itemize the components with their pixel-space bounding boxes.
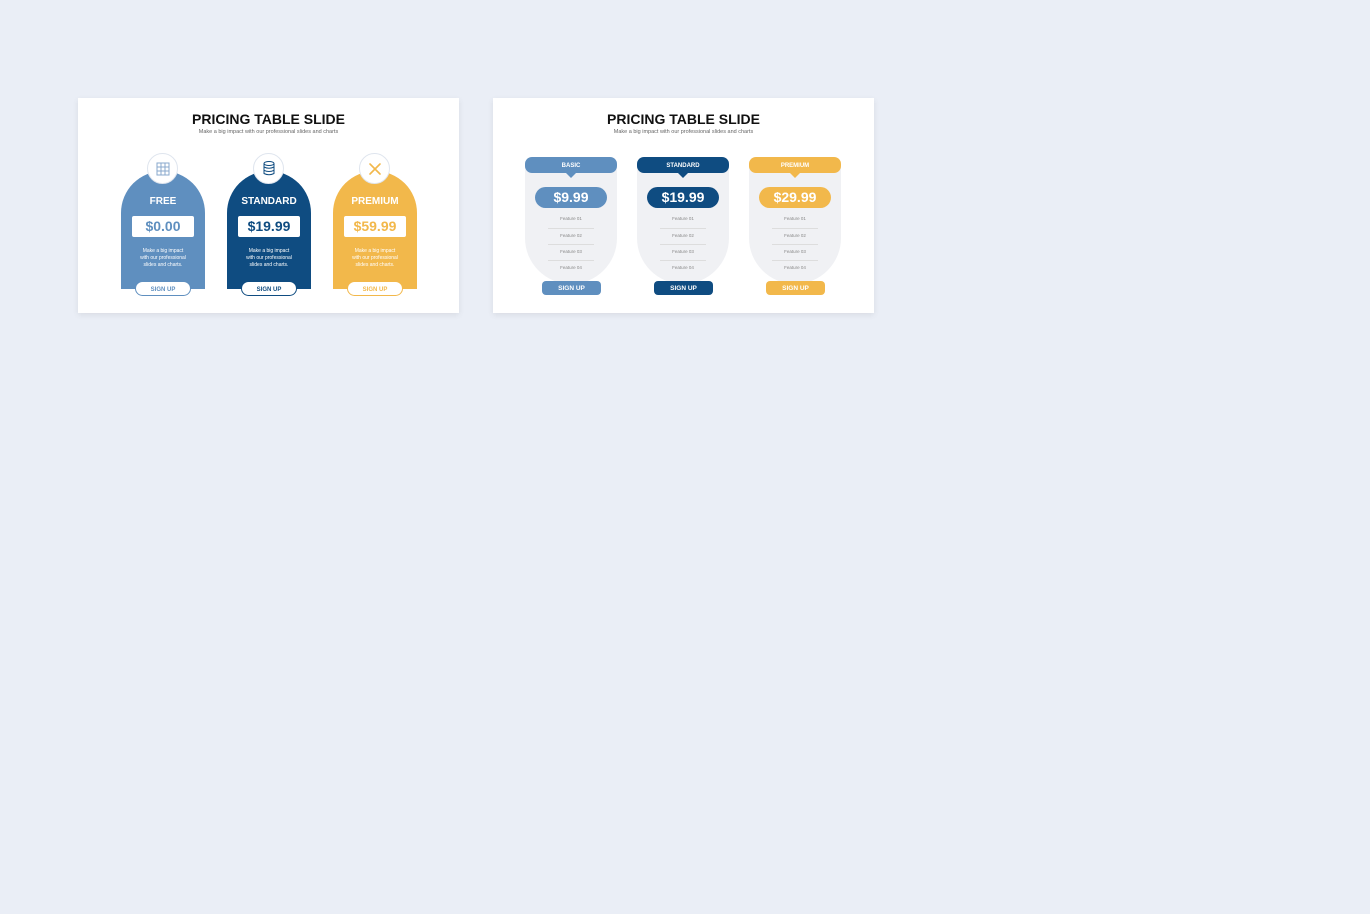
subtitle: Make a big impact with our professional slides and charts [614, 129, 753, 135]
card: premium: Feature 04 [784, 265, 806, 270]
card: standard: STANDARD [241, 196, 297, 207]
card: free: with our professional [140, 255, 186, 261]
header: standard: STANDARD [666, 163, 700, 169]
button: standard: SIGN UP [670, 285, 697, 292]
title: PRICING TABLE SLIDE [192, 111, 345, 127]
card: premium: Feature 02 [784, 233, 806, 238]
card: free: FREE [150, 196, 176, 207]
card: standard: Feature 01 [672, 216, 694, 221]
button: premium sign up [347, 281, 403, 296]
price: standard: $19.99 [662, 189, 704, 205]
button: basic [542, 281, 601, 295]
card: standard: with our professional [246, 255, 292, 261]
button: premium [766, 281, 825, 295]
card: premium: with our professional [352, 255, 398, 261]
button: premium sign up: SIGN UP [363, 287, 387, 293]
button: free sign up: SIGN UP [151, 287, 175, 293]
card: basic: Feature 02 [560, 233, 582, 238]
button: standard [654, 281, 713, 295]
card: free [121, 171, 205, 289]
header: premium [749, 157, 841, 173]
header: standard [637, 157, 729, 173]
card: basic: Feature 01 [560, 216, 582, 221]
icon: database [253, 153, 284, 184]
card: standard: Make a big impact [249, 248, 289, 254]
price: premium [759, 187, 831, 208]
card: basic: Feature 04 [560, 265, 582, 270]
card: premium: slides and charts. [356, 262, 394, 268]
card: standard: Feature 04 [672, 265, 694, 270]
button: standard sign up [241, 281, 297, 296]
card: basic: Feature 03 [560, 249, 582, 254]
card: standard [227, 171, 311, 289]
card: premium [749, 158, 841, 284]
card: premium: Feature 01 [784, 216, 806, 221]
header: basic: BASIC [562, 163, 580, 169]
slide 2: feature pricing cards [493, 98, 874, 313]
card: premium: PREMIUM [351, 196, 399, 207]
card: standard: slides and charts. [250, 262, 288, 268]
card: standard: $19.99 [248, 218, 290, 234]
slide 1: arched pricing cards [78, 98, 459, 313]
card: basic [525, 158, 617, 284]
card: premium: Make a big impact [355, 248, 395, 254]
card: standard: Feature 02 [672, 233, 694, 238]
button: premium: SIGN UP [782, 285, 809, 292]
card: premium: Feature 03 [784, 249, 806, 254]
icon: grid [147, 153, 178, 184]
header: basic [525, 157, 617, 173]
price: standard [647, 187, 719, 208]
button: standard sign up: SIGN UP [257, 287, 281, 293]
price: basic [535, 187, 607, 208]
subtitle: Make a big impact with our professional slides and charts [199, 129, 338, 135]
card: free: $0.00 [145, 218, 181, 234]
button: basic: SIGN UP [558, 285, 585, 292]
price: basic: $9.99 [553, 189, 589, 205]
card: standard [637, 158, 729, 284]
title: PRICING TABLE SLIDE [607, 111, 760, 127]
header: premium: PREMIUM [781, 163, 809, 169]
price: premium: $29.99 [774, 189, 816, 205]
card: premium: $59.99 [354, 218, 396, 234]
card: premium [333, 171, 417, 289]
button: free sign up [135, 281, 191, 296]
card: free: Make a big impact [143, 248, 183, 254]
icon: tools [359, 153, 390, 184]
card: standard: Feature 03 [672, 249, 694, 254]
card: free: slides and charts. [144, 262, 182, 268]
